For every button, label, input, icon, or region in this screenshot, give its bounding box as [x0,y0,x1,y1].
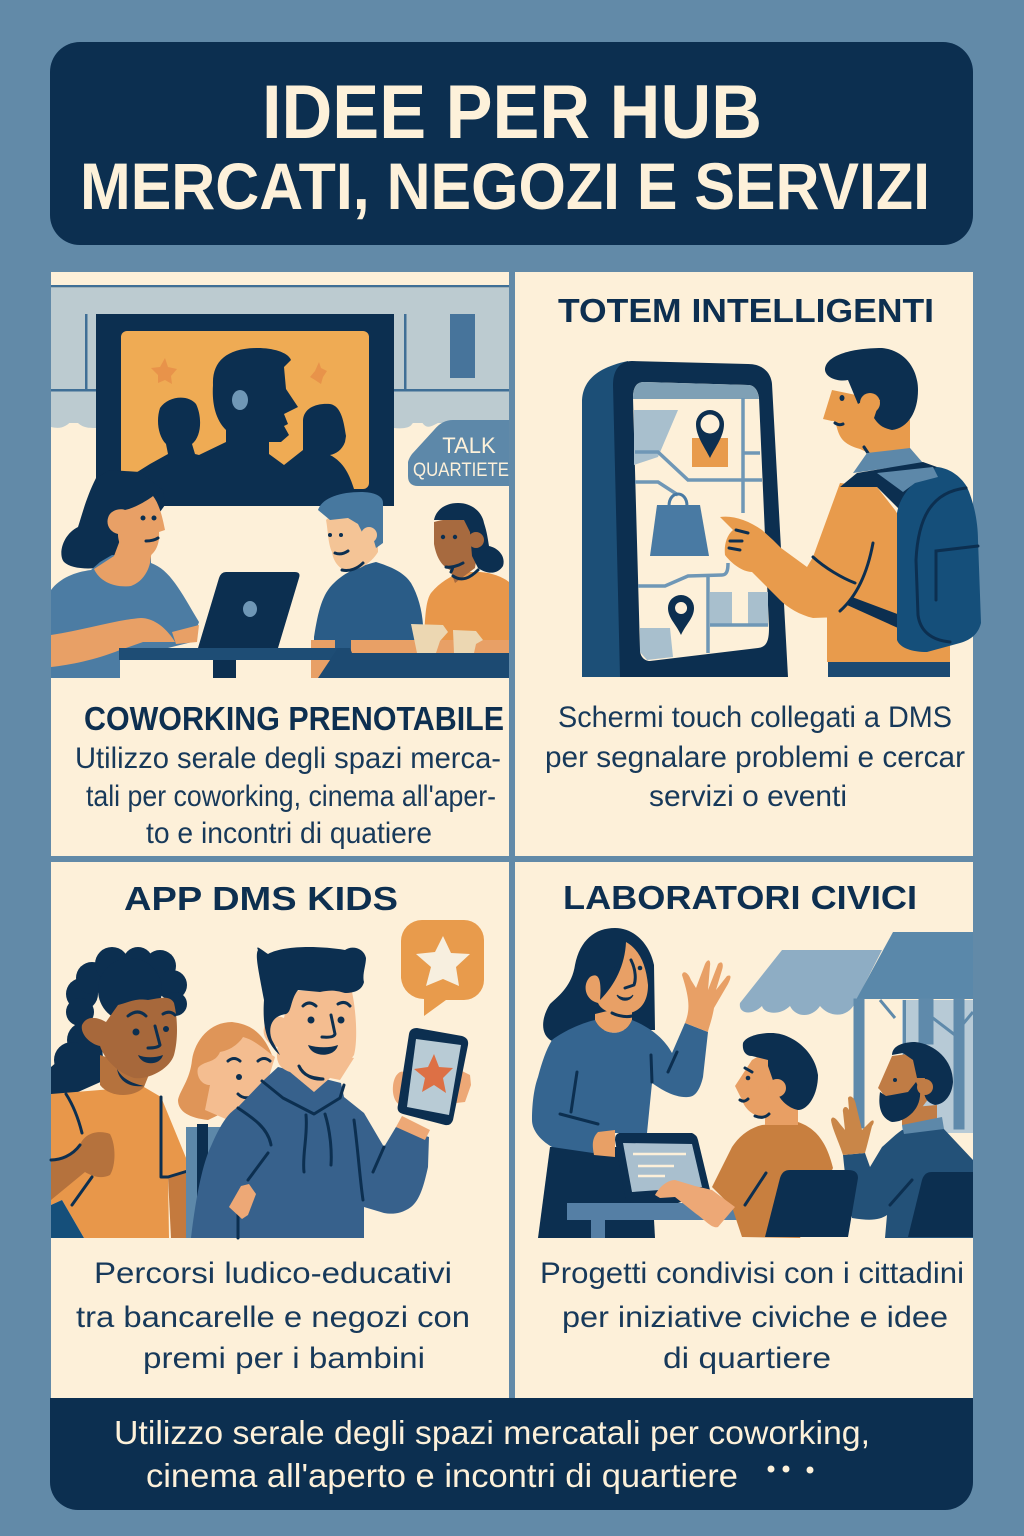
man with blue hair [314,492,423,655]
pointing arm [720,517,857,618]
backpack [897,467,981,652]
illustration: children with app [51,920,484,1238]
table [567,1203,742,1238]
girl in orange [424,503,509,655]
description: app dms kids: premi per i bambini [143,1342,425,1375]
talk sign [408,420,509,486]
description: totem: per segnalare problemi e cercar [545,741,965,774]
footer banner: cinema all'aperto e incontri di quartiere [146,1457,738,1494]
woman waving [532,928,730,1238]
talk sign: TALK [442,433,496,458]
chairs [765,1170,973,1237]
footer banner [50,1398,973,1510]
description: app dms kids: tra bancarelle e negozi con [76,1301,470,1334]
heading: totem intelligenti: TOTEM INTELLIGENTI [558,292,934,329]
panel: app dms kids [51,862,509,1398]
laptop [198,572,300,648]
girl with red hair [178,1022,275,1238]
illustration: evening cinema and coworking [51,285,509,678]
icon: map pin dark [668,595,694,635]
girl with curly hair [51,947,194,1238]
illustration: civic workshop [532,928,973,1238]
fingers around phone [393,1068,471,1140]
table and drinks [119,624,509,678]
icon: tablet [615,1133,710,1203]
icon: map pin orange [692,410,728,467]
market stall [740,932,973,1133]
icon: star speech bubble [401,920,484,1016]
description: laboratori civici: per iniziative civiche e idee [562,1301,948,1334]
talk sign: QUARTIETE [413,460,509,481]
hand on shoulder [229,1184,256,1219]
panel: coworking prenotabile [51,272,509,856]
description: app dms kids [76,1257,470,1375]
totem kiosk [582,361,788,677]
raised hand [682,960,730,1032]
description: coworking: tali per coworking, cinema all'aper- [86,780,496,813]
visitor with backpack [720,348,981,677]
title banner: MERCATI, NEGOZI E SERVIZI [80,149,930,223]
description: laboratori civici [540,1257,964,1375]
heading: app dms kids: APP DMS KIDS [124,880,398,917]
bearded man [831,1042,973,1238]
description: laboratori civici: di quartiere [663,1342,831,1375]
heading: coworking prenotabile: COWORKING PRENOTABILE [84,700,504,737]
heading: laboratori civici: LABORATORI CIVICI [563,879,917,916]
silhouettes on the screen [121,348,354,506]
title banner [50,42,973,245]
title banner: IDEE PER HUB [262,70,762,155]
description: laboratori civici: Progetti condivisi con i cittadini [540,1257,964,1290]
illustration: smart totem and visitor [582,348,981,677]
woman at laptop [51,470,199,678]
panel: totem intelligenti [515,272,981,856]
description: app dms kids: Percorsi ludico-educativi [94,1257,452,1290]
icon: shopping bag [650,494,709,556]
description: coworking [75,742,501,850]
description: coworking: Utilizzo serale degli spazi merca- [75,742,501,775]
footer banner: Utilizzo serale degli spazi mercatali per coworking, [114,1414,870,1451]
pagination dots [768,1466,814,1474]
panel: laboratori civici [515,862,973,1398]
description: totem: servizi o eventi [649,780,847,813]
description: totem: Schermi touch collegati a DMS [558,701,952,734]
description: totem [545,701,965,813]
seated man [655,1033,833,1238]
icon: phone [398,1028,468,1125]
description: coworking: to e incontri di quatiere [146,817,432,850]
boy with hoodie [191,947,471,1238]
